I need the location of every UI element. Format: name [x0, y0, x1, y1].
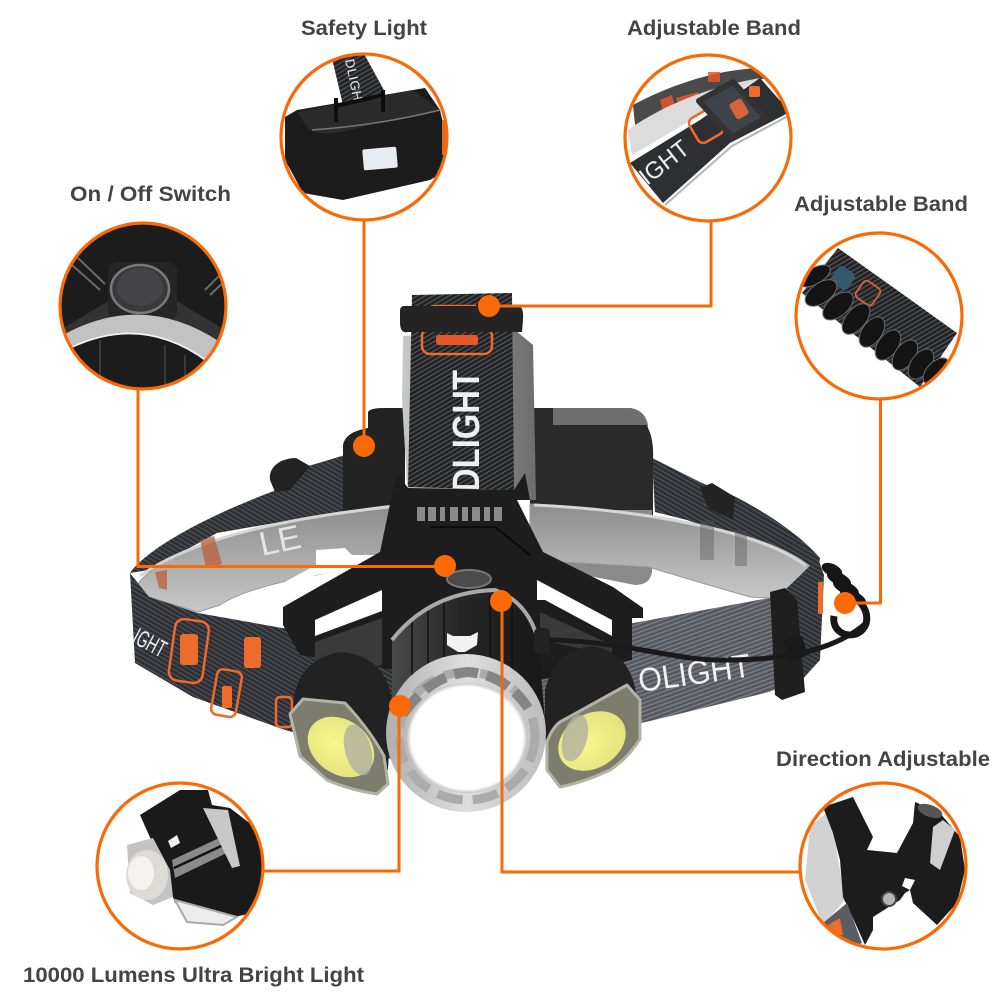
lens overlay [339, 722, 377, 778]
screw [882, 892, 896, 906]
silver ring [930, 820, 955, 870]
clear strap band [628, 78, 760, 155]
background [62, 224, 224, 388]
bezel teeth dark top [403, 672, 528, 714]
ring [625, 55, 791, 221]
detail circle: on off switch [55, 220, 235, 395]
detail circle: direction adjustable [800, 783, 966, 950]
band clip right [770, 588, 805, 700]
coil spring [803, 264, 948, 383]
adjuster slider back right [700, 483, 735, 520]
marker: adjustable band top [478, 295, 500, 317]
orange mark top [749, 86, 760, 97]
box top face [297, 90, 440, 134]
orange fill small [222, 686, 232, 708]
ring [800, 783, 966, 949]
leader line: direction adjustable [502, 601, 800, 872]
blurred orange marks [660, 72, 720, 110]
shield [547, 685, 640, 787]
vent slots [417, 507, 502, 521]
barrel grooves [172, 833, 233, 878]
button [117, 268, 163, 306]
top button [916, 801, 944, 821]
side lamp lens [175, 900, 237, 925]
leader line: on off switch [138, 389, 445, 566]
left window band [315, 618, 382, 680]
detail circle: adjustable band right [796, 233, 962, 399]
yellow lens [547, 699, 637, 783]
diagonal ridges [72, 258, 228, 295]
heading: direction adjustable: Direction Adjustable [776, 748, 990, 771]
orange mark [854, 279, 882, 307]
bezel outer [386, 654, 546, 812]
teal mark [831, 266, 855, 290]
coil [819, 560, 868, 635]
barrel logo [168, 835, 180, 848]
right band end [785, 558, 824, 682]
strap edge [665, 115, 790, 205]
main lens bezel [386, 654, 546, 812]
ring [97, 783, 263, 949]
band text: IGHT [128, 623, 171, 663]
heading: ultra bright light: 10000 Lumens Ultra Bright Light [23, 964, 364, 987]
orange square lower [276, 697, 292, 727]
orange on buckle [730, 98, 748, 120]
clear strap right [530, 504, 812, 598]
right front band [540, 590, 800, 740]
strap text: IGHT [634, 135, 695, 191]
marker: safety light [353, 435, 375, 457]
detail circle: safety light [281, 50, 448, 220]
orange marks right end [818, 582, 823, 614]
detail circle: adjustable band top [625, 55, 791, 221]
faded marks through strap right [700, 520, 747, 566]
hairline [72, 333, 207, 361]
band text: OLIGHT [636, 647, 753, 699]
adjuster buckle back left [270, 458, 310, 492]
left window white [315, 590, 382, 636]
side lamp left [290, 652, 392, 794]
orange mark [688, 110, 724, 144]
battery box [285, 88, 447, 200]
clear strap highlight left [140, 506, 398, 576]
power wire [546, 623, 866, 660]
blurred back strap [633, 68, 775, 125]
silver band [63, 315, 220, 360]
lens overlay [557, 712, 593, 764]
battery box shell [343, 408, 405, 560]
strap [802, 248, 957, 387]
strap upper mark [422, 306, 482, 316]
white gap in clear strap left [270, 548, 382, 590]
housing shoulder [64, 302, 222, 340]
lens highlight [128, 856, 154, 890]
marker: direction adjustable [490, 590, 512, 612]
wire clamp [783, 636, 808, 662]
clear strap highlight right [534, 505, 806, 566]
marker: on off switch [434, 555, 456, 577]
strap text: DLIGH [342, 58, 365, 102]
strap loop [336, 90, 383, 122]
groove shadow [174, 841, 232, 868]
bezel [127, 838, 173, 905]
dome [293, 652, 392, 770]
right window dark [540, 612, 612, 655]
orange mark [828, 918, 843, 935]
strap [630, 78, 790, 203]
right window white [537, 580, 612, 636]
strap orange mark [422, 328, 492, 354]
barrel grooves [412, 596, 512, 680]
bracket ridge [430, 527, 530, 555]
band fabric [130, 573, 395, 760]
yellow lens [296, 704, 386, 790]
heading: safety light: Safety Light [301, 17, 427, 40]
button bezel [111, 265, 169, 313]
back strap left [130, 455, 350, 573]
lower barrel stripes [99, 340, 186, 384]
orange square large [168, 618, 210, 684]
back strap right [652, 458, 820, 590]
faded marks through strap left [155, 536, 222, 590]
orange square small [210, 668, 243, 718]
band fabric [540, 590, 800, 740]
ring [796, 233, 962, 399]
faded LED text seen through strap: LE [256, 518, 304, 564]
headlamp product illustration [128, 293, 868, 812]
heading: on off switch: On / Off Switch [70, 183, 231, 206]
strap [332, 56, 384, 102]
strap text: DLIGHT [446, 370, 488, 492]
heading: adjustable band right: Adjustable Band [794, 193, 968, 216]
bezel teeth light [399, 672, 535, 800]
leader line: adjustable band right [845, 399, 880, 603]
band end [823, 903, 862, 950]
ring [60, 223, 226, 389]
translucent side of top strap [402, 330, 536, 500]
barrel and lamp body [140, 790, 265, 917]
lens [407, 683, 527, 793]
LED window [362, 147, 398, 170]
orange side edge [442, 120, 446, 155]
orange block [244, 637, 261, 668]
heading: adjustable band top: Adjustable Band [627, 17, 801, 40]
battery box lit top [553, 408, 648, 425]
bracket body [283, 473, 643, 700]
clear elastic strap left [135, 504, 400, 612]
leader line: adjustable band top [490, 221, 711, 306]
buckle [699, 82, 766, 137]
strap fabric [408, 293, 514, 490]
battery seen through strap [534, 510, 652, 585]
bracket and lamp silhouette [823, 797, 965, 945]
strap buckle [400, 306, 523, 332]
leader line: ultra bright light [263, 706, 399, 871]
clear strap wedge [805, 810, 845, 925]
ring [281, 54, 447, 220]
wire clip [534, 628, 550, 654]
switch button [447, 570, 491, 588]
detail circle: ultra bright light [97, 783, 265, 949]
marker: adjustable band right [834, 592, 856, 614]
head bracket [283, 473, 643, 700]
orange square fill [180, 634, 198, 665]
top strap [408, 293, 514, 492]
strap orange fill [436, 335, 478, 345]
barrel logo [447, 632, 478, 652]
white notch [902, 878, 915, 890]
side lamp right [545, 646, 640, 787]
silver ring [203, 808, 240, 868]
left front band [128, 573, 395, 760]
box highlight [312, 110, 440, 130]
silver barrel ring [392, 590, 538, 640]
battery box right shell [530, 408, 653, 520]
housing [108, 262, 177, 320]
leader line: safety light [362, 220, 366, 446]
marker: ultra bright light [389, 695, 411, 717]
dome [545, 646, 637, 745]
shield [290, 699, 388, 794]
lens [126, 850, 168, 900]
battery box [343, 408, 653, 585]
lamp barrel [392, 592, 545, 720]
